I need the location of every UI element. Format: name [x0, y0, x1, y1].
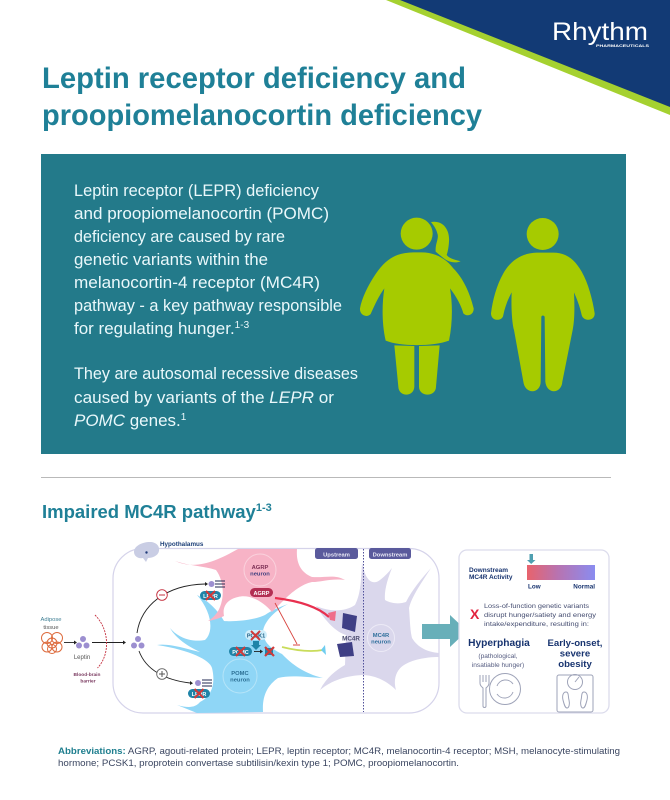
downstream activity bar: Low — [528, 584, 541, 590]
receptor: LEPR on AGRP: LEPR — [203, 594, 218, 600]
variants text: intake/expenditure, resulting in: — [484, 622, 589, 628]
intro text: POMC genes. — [74, 411, 181, 430]
leptin — [64, 636, 126, 661]
early-onset obesity: Early-onset, — [548, 638, 603, 649]
abbreviations footnote: Abbreviations: AGRP, agouti-related protein; LEPR, leptin receptor; MC4R, melanocortin-4 receptor; MSH, melanocyte-stimulating — [58, 746, 620, 756]
arrow: to outcomes — [422, 615, 467, 647]
title: proopiomelanocortin deficiency — [42, 99, 482, 132]
PCSK1 and POMC pills with crosses — [229, 630, 274, 656]
adipose tissue — [41, 617, 62, 654]
intro text: and proopiomelanocortin (POMC) — [74, 204, 329, 223]
neuron: MC4R: neuron — [371, 640, 391, 646]
receptor: LEPR on AGRP — [200, 581, 225, 600]
neuron: AGRP: neuron — [250, 572, 270, 578]
intro text: Leptin receptor (LEPR) deficiency — [74, 181, 319, 200]
intro text: pathway - a key pathway responsible — [74, 296, 342, 315]
icon: weighing scale — [557, 674, 593, 712]
intro text: deficiency are caused by rare — [74, 227, 285, 246]
downstream activity bar: Downstream — [469, 567, 508, 574]
intro text: for regulating hunger. — [74, 319, 235, 338]
neuron: MC4R: MC4R — [373, 633, 390, 639]
header banner — [386, 0, 670, 115]
downstream activity bar: Normal — [573, 584, 595, 590]
hypothalamus frame — [113, 548, 439, 713]
receptor: LEPR on POMC: LEPR — [192, 692, 206, 698]
panel: outcomes — [459, 550, 609, 713]
icon: brain and Hypothalamus label: Hypothalamus — [160, 541, 204, 548]
leptin pathway arrows — [131, 582, 208, 685]
intro text: 1-3 — [235, 320, 250, 331]
neuron: AGRP: AGRP — [252, 565, 269, 571]
chart: pathway diagram — [41, 541, 439, 713]
dotted divider and tags: Downstream — [373, 552, 407, 558]
intro text: They are autosomal recessive diseases — [74, 364, 358, 383]
adipose tissue: tissue — [43, 625, 59, 631]
logo: Rhythm Pharmaceuticals: Rhythm — [552, 18, 648, 46]
blood-brain barrier: Blood-brain — [74, 672, 101, 678]
MC4R receptors — [337, 613, 360, 657]
AGRP pill and axon: AGRP — [254, 591, 270, 597]
variants text: X — [470, 606, 480, 622]
dotted divider and tags: Upstream — [323, 552, 350, 558]
variants text: Loss-of-function genetic variants — [484, 604, 589, 610]
adipose tissue: Adipose — [41, 617, 61, 623]
variants text — [470, 604, 596, 628]
heading: Impaired MC4R pathway: Impaired MC4R pathway — [42, 501, 256, 522]
intro text: 1 — [181, 412, 187, 423]
blood-brain barrier — [74, 615, 107, 684]
downstream activity bar: MC4R Activity — [469, 574, 513, 581]
title — [42, 62, 482, 132]
early-onset obesity: severe — [560, 648, 590, 660]
intro text — [74, 181, 358, 430]
AGRP pill and axon — [250, 588, 336, 645]
hyperphagia: insatiable hunger) — [472, 662, 524, 669]
intro text: caused by variants of the LEPR or — [74, 388, 334, 407]
PCSK1 and POMC pills with crosses: POMC — [232, 650, 249, 656]
early-onset obesity — [548, 638, 603, 670]
blood-brain barrier: barrier — [80, 678, 96, 684]
title: Leptin receptor deficiency and — [42, 62, 466, 95]
neuron: POMC: neuron — [230, 678, 250, 684]
hyperphagia — [468, 638, 530, 669]
downstream activity bar — [469, 554, 595, 590]
icon: woman and man figures — [360, 218, 595, 395]
early-onset obesity: obesity — [558, 659, 592, 670]
logo: Rhythm Pharmaceuticals: PHARMACEUTICALS — [596, 43, 649, 48]
neuron: POMC — [157, 595, 323, 713]
neuron: POMC: POMC — [231, 671, 250, 677]
icon: brain and Hypothalamus label — [134, 541, 204, 562]
neuron: MC4R — [316, 562, 439, 690]
dotted divider and tags — [315, 548, 411, 712]
intro text: genetic variants within the — [74, 250, 268, 269]
MC4R receptors: MC4R — [342, 636, 360, 642]
intro text: melanocortin-4 receptor (MC4R) — [74, 273, 320, 292]
variants text: disrupt hunger/satiety and energy — [484, 613, 596, 619]
icon: plate and fork — [480, 674, 520, 708]
heading: Impaired MC4R pathway: 1-3 — [256, 502, 272, 514]
panel: intro — [41, 154, 626, 454]
abbreviations footnote: hormone; PCSK1, proprotein convertase subtilisin/kexin type 1; POMC, proopiomelanocortin. — [58, 758, 459, 768]
hyperphagia: Hyperphagia — [468, 638, 530, 649]
hyperphagia: (pathological, — [478, 653, 518, 660]
neuron: AGRP — [175, 549, 345, 621]
receptor: LEPR on POMC — [188, 680, 212, 698]
leptin: Leptin — [74, 655, 90, 661]
POMC axon — [282, 645, 326, 655]
abbreviations footnote — [58, 746, 620, 768]
PCSK1 and POMC pills with crosses: PCSK1 — [247, 634, 265, 640]
